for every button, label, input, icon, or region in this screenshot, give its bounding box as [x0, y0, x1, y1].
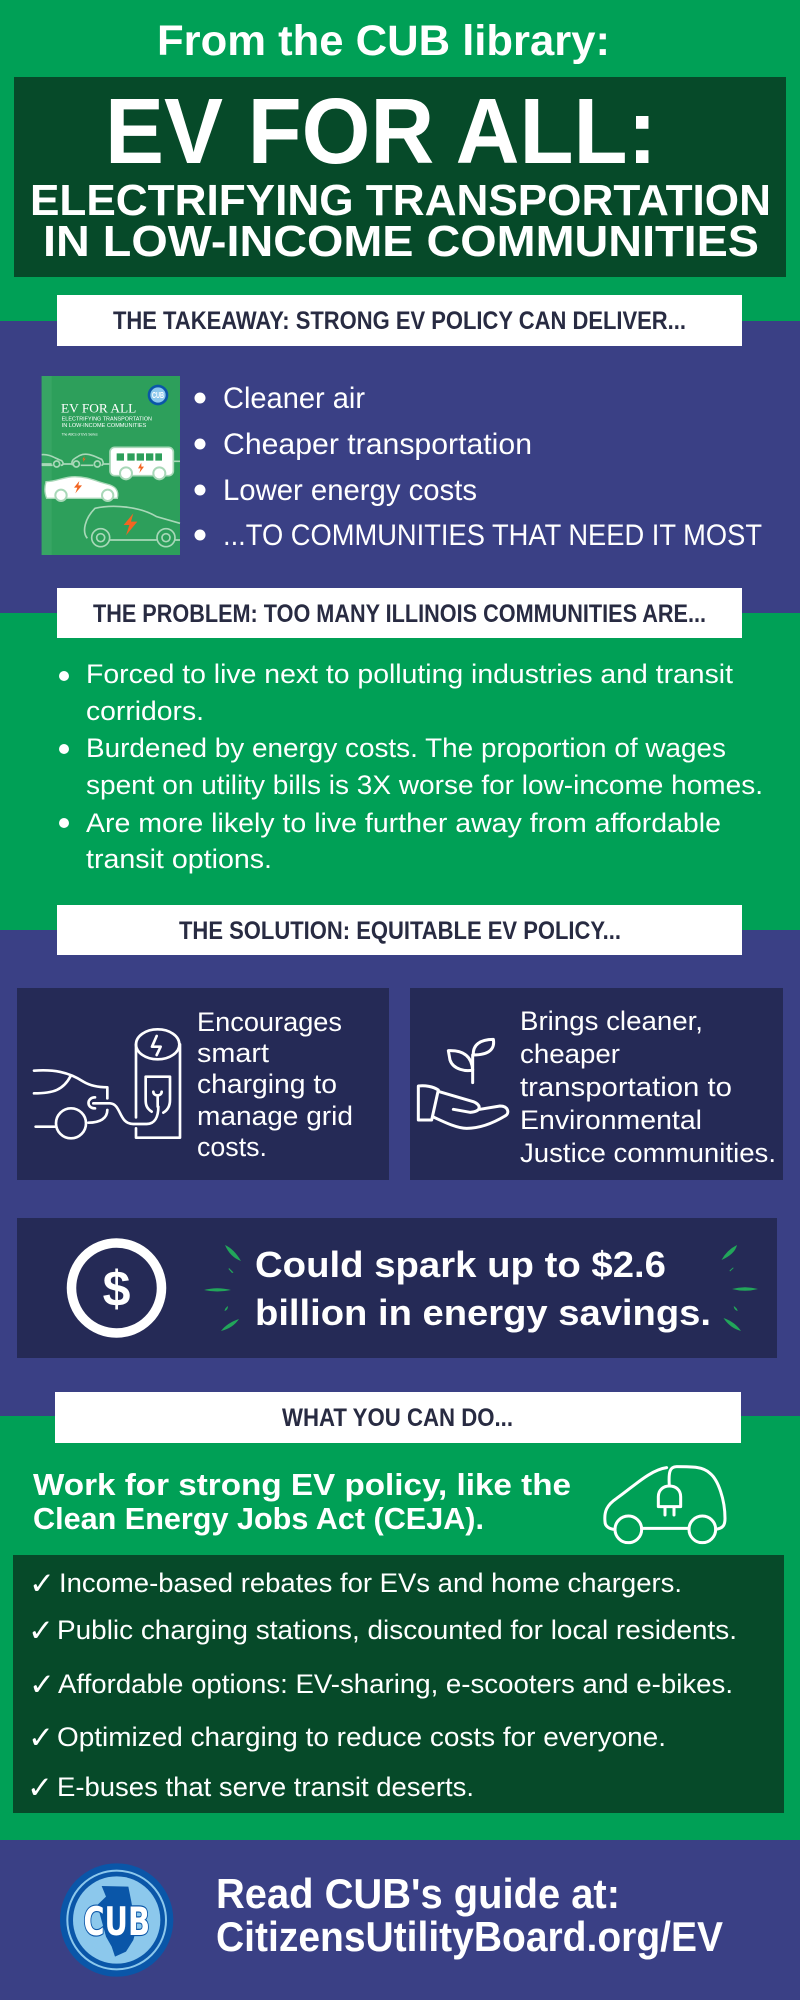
solution heading bar — [57, 905, 742, 955]
environmental justice text: cheaper — [520, 1039, 620, 1069]
environmental justice text: Environmental — [520, 1105, 702, 1135]
checklist item 1: ✓ — [29, 1566, 55, 1602]
background: solution blue band — [0, 930, 800, 1416]
problem bullet list: Burdened by energy costs. The proportion of wages — [86, 733, 726, 763]
cover subtitle: IN LOW-INCOME COMMUNITIES — [62, 423, 147, 429]
panel: environmental justice — [410, 988, 783, 1180]
action heading text: Clean Energy Jobs Act (CEJA). — [33, 1501, 484, 1536]
cover logo — [148, 385, 168, 405]
smart charging text: smart — [197, 1038, 270, 1068]
savings text — [255, 1244, 711, 1333]
checklist item 3: Affordable options: EV-sharing, e-scooters and e-bikes. — [58, 1669, 733, 1699]
smart charging text: charging to — [197, 1069, 337, 1099]
action heading text: Work for strong EV policy, like the — [33, 1467, 571, 1502]
checklist item 5: ✓ — [27, 1770, 53, 1806]
white car — [45, 477, 118, 501]
cover title: EV FOR ALL — [61, 401, 136, 415]
Illinois silhouette — [97, 1886, 136, 1957]
background: action green band — [0, 1416, 800, 1840]
smart charging text: Encourages — [197, 1007, 342, 1037]
problem bullet list: transit options. — [86, 844, 272, 874]
environmental justice text: Brings cleaner, — [520, 1006, 703, 1036]
takeaway bullet list: Lower energy costs — [223, 474, 477, 507]
environmental justice text: Justice communities. — [520, 1138, 776, 1168]
footer call to action: Read CUB's guide at: — [216, 1870, 620, 1917]
takeaway heading bar: THE TAKEAWAY: STRONG EV POLICY CAN DELIVER... — [113, 307, 686, 335]
background: problem green band — [0, 613, 800, 930]
takeaway bullet list: ...TO COMMUNITIES THAT NEED IT MOST — [223, 519, 762, 552]
problem heading bar — [57, 588, 742, 638]
solution heading bar: THE SOLUTION: EQUITABLE EV POLICY... — [179, 917, 621, 945]
icon: electric car with plug — [605, 1467, 725, 1543]
icon: hand holding sprout — [418, 1039, 508, 1128]
checklist item 2: Public charging stations, discounted for local residents. — [57, 1615, 737, 1645]
subtitle — [30, 176, 771, 266]
takeaway bullet list: Cheaper transportation — [223, 428, 532, 461]
checklist item 4: ✓ — [28, 1720, 54, 1756]
green spark shapes — [204, 1245, 758, 1331]
problem bullet list: spent on utility bills is 3X worse for low-income homes. — [86, 770, 763, 800]
kicker heading: From the CUB library: — [157, 17, 610, 65]
cover subtitle: ELECTRIFYING TRANSPORTATION — [62, 416, 152, 422]
CUB logo — [60, 1863, 173, 1977]
panel: smart charging — [17, 988, 389, 1180]
problem bullet list: Are more likely to live further away from affordable — [86, 808, 721, 838]
report cover image — [42, 376, 180, 555]
title panel — [14, 77, 786, 277]
subtitle: ELECTRIFYING TRANSPORTATION — [30, 176, 771, 225]
checklist item 2: ✓ — [28, 1613, 54, 1649]
smart charging text — [197, 1007, 353, 1162]
action checklist panel — [13, 1555, 784, 1813]
smart charging text: manage grid — [197, 1101, 353, 1131]
footer call to action — [216, 1870, 723, 1960]
takeaway heading bar — [57, 295, 742, 346]
background: footer blue band — [0, 1840, 800, 2000]
main title: EV FOR ALL: — [105, 79, 657, 183]
savings text: Could spark up to $2.6 — [255, 1244, 666, 1285]
panel: energy savings callout — [17, 1218, 777, 1358]
checklist item 1: Income-based rebates for EVs and home chargers. — [59, 1568, 682, 1598]
checklist item 5: E-buses that serve transit deserts. — [57, 1772, 474, 1802]
icon: dollar coin: $ — [103, 1261, 131, 1317]
problem bullet list: corridors. — [86, 696, 204, 726]
background: takeaway blue band — [0, 321, 800, 613]
takeaway bullet list: Cleaner air — [223, 382, 365, 415]
savings text: billion in energy savings. — [255, 1292, 711, 1333]
action heading bar — [55, 1392, 741, 1443]
subtitle: IN LOW-INCOME COMMUNITIES — [43, 217, 759, 266]
background: top green band — [0, 0, 800, 321]
takeaway bullet list — [194, 382, 762, 552]
action heading text — [33, 1467, 571, 1536]
environmental justice text — [520, 1006, 776, 1168]
bus — [110, 447, 173, 479]
footer call to action: CitizensUtilityBoard.org/EV — [216, 1913, 723, 1960]
large car bolt — [124, 513, 137, 535]
cover subtitle: The ABCs of EVs Series — [62, 433, 98, 437]
checklist item 4: Optimized charging to reduce costs for everyone. — [57, 1722, 666, 1752]
smart charging text: costs. — [197, 1132, 267, 1162]
problem bullet list — [59, 659, 763, 874]
problem bullet list: Forced to live next to polluting industries and transit — [86, 659, 734, 689]
cover subtitle — [62, 416, 152, 437]
environmental justice text: transportation to — [520, 1072, 732, 1102]
action heading bar: WHAT YOU CAN DO... — [282, 1404, 513, 1432]
checklist item 3: ✓ — [29, 1667, 55, 1703]
icon: car plugged into charger — [34, 1029, 180, 1138]
small car bolt — [82, 456, 86, 462]
icon: dollar coin — [72, 1243, 162, 1333]
problem heading bar: THE PROBLEM: TOO MANY ILLINOIS COMMUNITIES ARE... — [93, 600, 706, 628]
cover logo: CUB — [152, 391, 164, 400]
logo lettering: CUB — [83, 1899, 150, 1945]
road line and small outlined cars — [42, 454, 180, 547]
